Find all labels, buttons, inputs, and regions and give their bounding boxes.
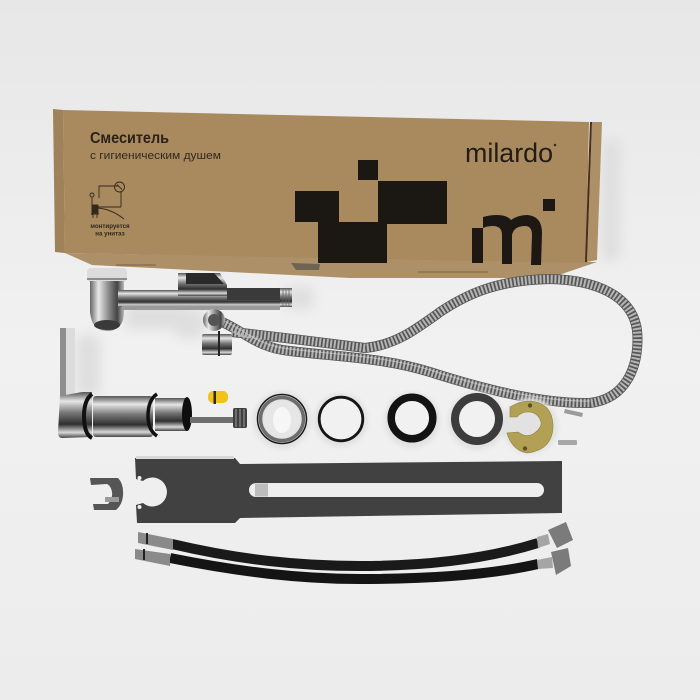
icon caption — [90, 223, 130, 238]
spray stem — [118, 290, 281, 307]
yellow valve — [208, 391, 228, 404]
large m logo — [472, 199, 555, 265]
box front face — [63, 110, 589, 263]
grey pixel on underside — [291, 263, 320, 270]
box left flap — [53, 109, 65, 253]
box subheading: с гигиеническим душем — [90, 150, 221, 162]
icon caption: монтируется — [90, 223, 130, 230]
thin rubber ring — [319, 397, 363, 441]
faucet second seal — [148, 394, 157, 436]
upper braided hose — [172, 543, 538, 566]
braided water hoses — [170, 543, 538, 579]
left hose fittings — [135, 532, 173, 566]
brass half ring — [507, 401, 553, 453]
mounting plate — [135, 456, 562, 523]
mounting clip — [90, 478, 123, 510]
icon: toilet mounting diagram — [90, 182, 124, 219]
registered mark — [554, 144, 556, 146]
faucet — [58, 328, 247, 438]
hose connectors — [202, 309, 232, 356]
faucet threaded section — [155, 398, 187, 431]
cartridge knob — [233, 408, 247, 428]
brand wordmark: milardo — [465, 138, 553, 168]
faucet seal — [84, 394, 92, 438]
right hose fittings — [537, 522, 573, 575]
spray head body — [90, 281, 124, 331]
icon caption: на унитаз — [95, 230, 125, 238]
spray trigger block — [178, 273, 227, 296]
box right flap — [587, 122, 602, 262]
cartridge rod — [190, 417, 234, 423]
spray head — [87, 268, 292, 331]
spray cap — [87, 268, 127, 282]
lower braided hose — [170, 558, 538, 579]
small screws — [558, 409, 583, 445]
chrome ring with glass centre — [258, 394, 306, 444]
underside faint print — [116, 264, 488, 273]
cast shadows on the background — [76, 140, 620, 395]
upper hose nut — [203, 309, 225, 331]
flexible steel hose — [222, 279, 637, 403]
box underside strip — [65, 253, 597, 278]
box heading: Смеситель — [90, 130, 169, 147]
black pixel graphic — [295, 160, 447, 263]
threaded end — [280, 288, 292, 307]
cardboard box — [53, 109, 602, 278]
grey gasket — [455, 397, 499, 441]
faucet cylinder — [93, 396, 153, 437]
black gasket — [391, 397, 433, 439]
faucet black end ring — [182, 397, 192, 431]
lower hose adapter — [202, 334, 232, 355]
faucet base — [58, 392, 92, 438]
ring soft shadows — [253, 391, 558, 454]
faucet lever handle — [60, 328, 75, 396]
